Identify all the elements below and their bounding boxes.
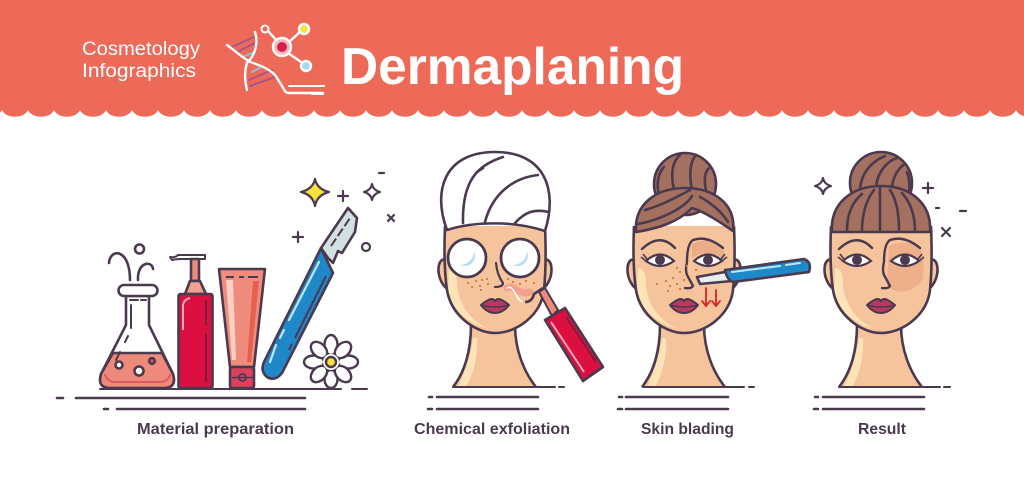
applicator bottle: [525, 288, 603, 381]
blade tool: [697, 259, 810, 284]
peeling gel: [507, 287, 530, 302]
head: [438, 226, 552, 387]
banner subtitle: [82, 39, 201, 82]
banner subtitle: Cosmetology: [82, 39, 201, 60]
sparkles: [293, 173, 394, 251]
head: [824, 226, 938, 387]
nose and freckles: [468, 263, 534, 290]
eye shadow: [692, 240, 724, 258]
turban: [441, 152, 550, 231]
panel: result: [814, 152, 966, 438]
goggles: [448, 239, 539, 277]
panel: skin blading: [618, 153, 810, 438]
icon: DNA and molecule: [227, 24, 324, 94]
label: Skin blading: [641, 421, 734, 438]
eyes: [838, 239, 924, 288]
icon: flask: [100, 244, 174, 388]
panel: material preparation: [57, 173, 394, 438]
base lines: [618, 387, 754, 409]
sparkles: [815, 178, 966, 236]
eye shadow: [887, 242, 924, 292]
icon: daisy: [304, 335, 358, 389]
head: [627, 226, 741, 387]
icon: scalpel: [263, 208, 357, 379]
shelf lines: [57, 389, 367, 409]
red arrows: [702, 288, 720, 306]
label: Result: [858, 421, 907, 438]
freckles: [657, 266, 696, 291]
panel: chemical exfoliation: [414, 152, 603, 438]
label: Chemical exfoliation: [414, 421, 570, 438]
base lines: [814, 387, 950, 409]
label: Material preparation: [137, 421, 294, 438]
eyes: [641, 239, 727, 288]
bun and fringe: [832, 152, 930, 232]
banner subtitle: Infographics: [82, 61, 196, 82]
icon: pump bottle: [170, 255, 212, 388]
title: Dermaplaning: [341, 38, 684, 96]
icon: cream tube: [219, 269, 265, 388]
base lines: [428, 387, 564, 409]
banner background: [0, 0, 1024, 117]
bun and hair: [636, 153, 733, 232]
